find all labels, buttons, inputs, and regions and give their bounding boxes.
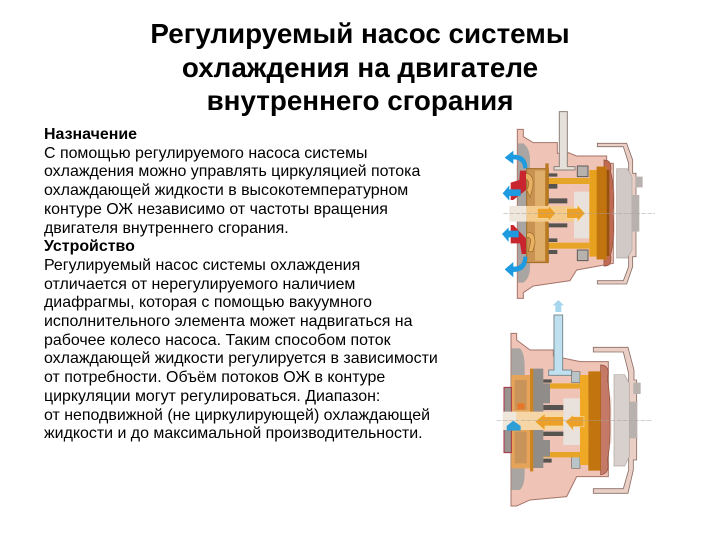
drive disc [614, 375, 629, 466]
rods [548, 178, 589, 249]
outlet nozzle [549, 315, 572, 375]
membrane [604, 160, 614, 266]
text block: description: циркуляции могут регулироваться. Диапазон: [44, 388, 380, 405]
text block: description: охлаждения можно управлять циркуляцией потока [44, 163, 420, 180]
title [150, 18, 570, 116]
cover [504, 387, 511, 453]
hub [632, 177, 643, 232]
title: охлаждения на двигателе [182, 52, 538, 82]
blue return flow [507, 421, 521, 431]
impeller [511, 375, 530, 468]
text block: description: охлаждающей жидкости регулируется в зависимости [44, 350, 438, 367]
drive disc [617, 169, 632, 258]
pump housing [517, 129, 613, 298]
pulley [597, 143, 636, 284]
impeller ring [530, 369, 533, 471]
gray center casing [533, 369, 550, 468]
text block: description: отличается от нерегулируемого наличием [44, 276, 355, 293]
rods [534, 383, 580, 457]
center body [563, 398, 605, 445]
text block: description: исполнительного элемента может надвигаться на [44, 313, 412, 330]
outflow arrow [553, 300, 564, 312]
center shaft body [574, 192, 608, 238]
text block: description: Назначение [44, 126, 137, 143]
gray seal plate [518, 143, 530, 283]
flow arrows: orange [537, 205, 585, 222]
text block: description: Регулируемый насос системы охлаждения [44, 257, 360, 274]
bolts [549, 173, 567, 254]
shaft [503, 412, 517, 430]
text block: description: двигателя внутреннего сгорания. [44, 220, 289, 237]
impeller vanes [525, 173, 535, 252]
text block: description: от потребности. Объём потоков ОЖ в контуре [44, 369, 385, 386]
text block: description: Устройство [44, 238, 135, 255]
diagram: pump with open flow [502, 112, 655, 298]
center line [497, 420, 653, 422]
text block: description: диафрагмы, которая с помощью вакуумного [44, 294, 372, 311]
flow arrows: orange [535, 413, 584, 431]
impeller [527, 169, 548, 263]
title: внутреннего сгорания [207, 85, 513, 116]
membrane [601, 365, 610, 475]
orange rotor [580, 375, 588, 465]
text block: description: С помощью регулируемого насоса системы [44, 145, 368, 162]
hub [629, 383, 641, 438]
title: Регулируемый насос системы [150, 18, 570, 49]
text block: description [44, 126, 438, 442]
shaft [509, 206, 527, 222]
pump housing [511, 333, 608, 506]
springs [572, 372, 580, 468]
diagram: pump with closed flow [497, 300, 653, 506]
red seal [511, 171, 526, 254]
text block: description: жидкости и до максимальной производительности. [44, 425, 423, 442]
text block: description: охлаждающей жидкости в высокотемпературном [44, 182, 408, 199]
outlet nozzle [554, 112, 575, 170]
center line [503, 212, 655, 214]
bolts [543, 379, 563, 463]
gray plate [511, 348, 525, 490]
pulley [593, 347, 637, 493]
text block: description: от неподвижной (не циркулирующей) охлаждающей [44, 407, 430, 424]
orange rotor plate [589, 167, 607, 259]
text block: description: контуре ОЖ независимо от частоты вращения [44, 201, 388, 218]
flow arrows: blue [502, 151, 527, 277]
text block: description: рабочее колесо насоса. Таким способом поток [44, 332, 391, 349]
springs [577, 166, 588, 261]
